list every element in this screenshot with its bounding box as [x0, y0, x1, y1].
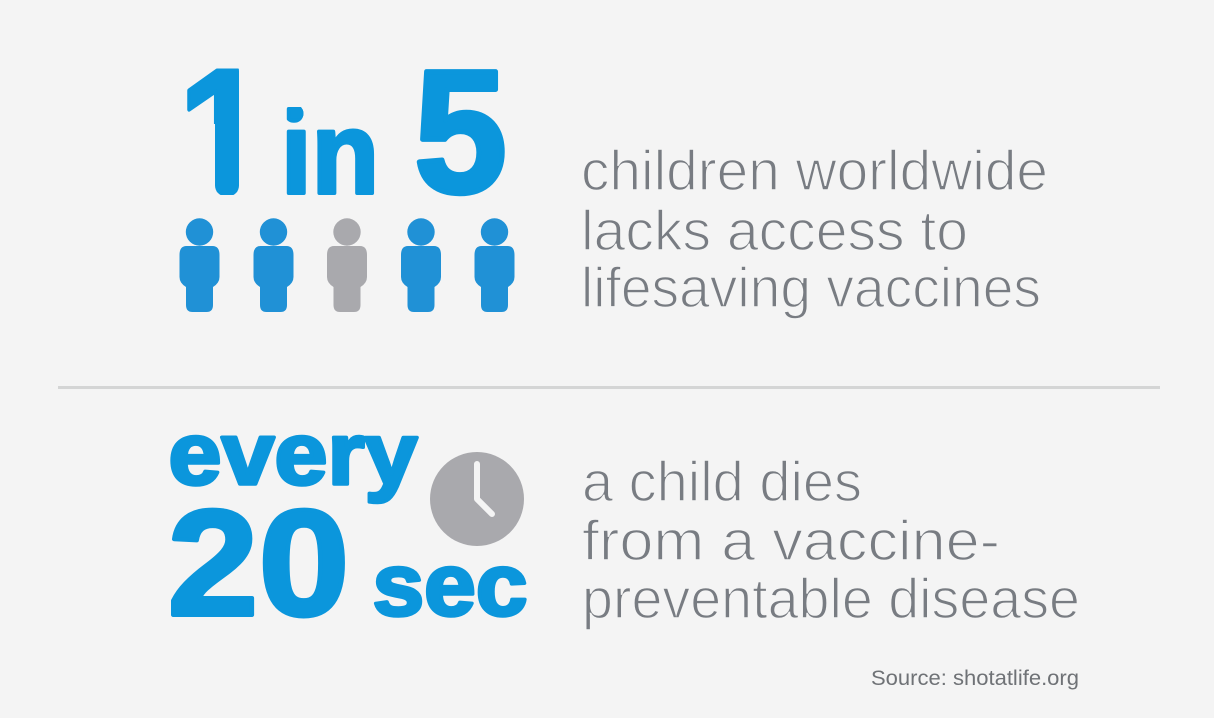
pictogram row: five people, one grey [180, 218, 514, 312]
text: children lacking access [581, 139, 1048, 320]
person 4 [401, 218, 441, 312]
word: every: every [168, 404, 418, 503]
word: in: in [281, 88, 379, 218]
headline: 1 in 5 [187, 68, 505, 196]
divider [58, 386, 1160, 389]
text: children lacking access: children worldwide [581, 139, 1048, 203]
person 5 [474, 218, 514, 312]
numeral 1: 1 [178, 32, 268, 231]
text: children lacking access: lifesaving vaccines [581, 256, 1041, 320]
text: child dies: preventable disease [582, 567, 1080, 631]
person 3 (grey) [327, 218, 367, 312]
numeral 20: 20 [168, 478, 350, 647]
person 2 [254, 218, 294, 312]
word: sec: sec [372, 535, 528, 634]
text: children lacking access: lacks access to [581, 199, 968, 263]
icon: clock [430, 452, 524, 546]
text: child dies [582, 450, 1080, 631]
text: child dies: a child dies [582, 450, 862, 514]
person 1 [180, 218, 220, 312]
headline: every 20 sec [168, 404, 528, 647]
text: child dies: from a vaccine- [582, 509, 1000, 573]
source note: Source: shotatlife.org [871, 666, 1079, 690]
numeral 5: 5 [414, 35, 507, 230]
